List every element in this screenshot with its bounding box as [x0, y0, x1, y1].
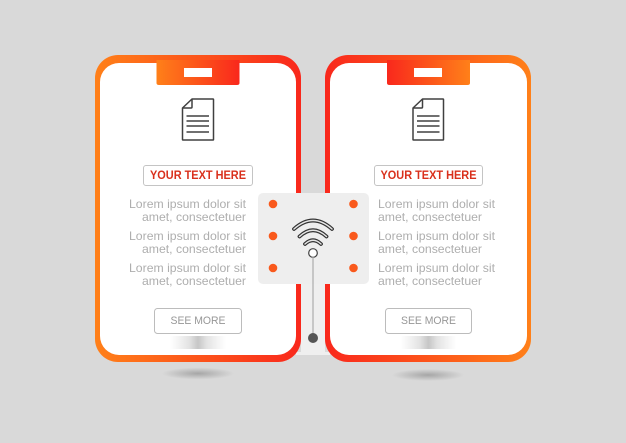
- connector strip: [296, 284, 330, 355]
- right text block: Lorem ipsum dolor sit: [378, 261, 496, 275]
- right text block: amet, consectetuer: [378, 242, 482, 256]
- left heading: YOUR TEXT HERE: [150, 169, 246, 182]
- icon: right document: [413, 99, 444, 140]
- right text block: Lorem ipsum dolor sit: [378, 229, 496, 243]
- left button: [154, 308, 242, 349]
- right heading: [374, 166, 482, 186]
- right shadow: [392, 369, 464, 381]
- right text block: Lorem ipsum dolor sit: [378, 197, 496, 211]
- right top tab: [387, 60, 470, 85]
- right text block: amet, consectetuer: [378, 274, 482, 288]
- left button: SEE MORE: [170, 315, 226, 327]
- icon: left document: [182, 99, 214, 140]
- left card frame: [95, 55, 301, 362]
- left text block: amet, consectetuer: [142, 274, 246, 288]
- right text block: amet, consectetuer: [378, 210, 482, 224]
- right button: SEE MORE: [401, 315, 456, 327]
- orange dots: [269, 200, 358, 272]
- pin line: [308, 257, 318, 343]
- panel: centre connector: [258, 193, 369, 343]
- right text block: [378, 197, 496, 288]
- left card body: [100, 63, 296, 355]
- right heading: YOUR TEXT HERE: [380, 169, 477, 182]
- icon: wifi: [294, 220, 332, 257]
- left text block: Lorem ipsum dolor sit: [129, 197, 247, 211]
- right card body: [330, 63, 527, 355]
- right card frame: [325, 55, 531, 362]
- left text block: Lorem ipsum dolor sit: [129, 229, 247, 243]
- left text block: amet, consectetuer: [142, 210, 246, 224]
- left text block: [129, 197, 247, 288]
- left text block: amet, consectetuer: [142, 242, 246, 256]
- left shadow: [162, 368, 234, 380]
- panel: right card: [325, 55, 531, 362]
- left text block: Lorem ipsum dolor sit: [129, 261, 247, 275]
- left heading: [144, 166, 252, 186]
- left top tab: [156, 60, 240, 85]
- right button: [386, 308, 472, 349]
- panel: left card: [95, 55, 301, 362]
